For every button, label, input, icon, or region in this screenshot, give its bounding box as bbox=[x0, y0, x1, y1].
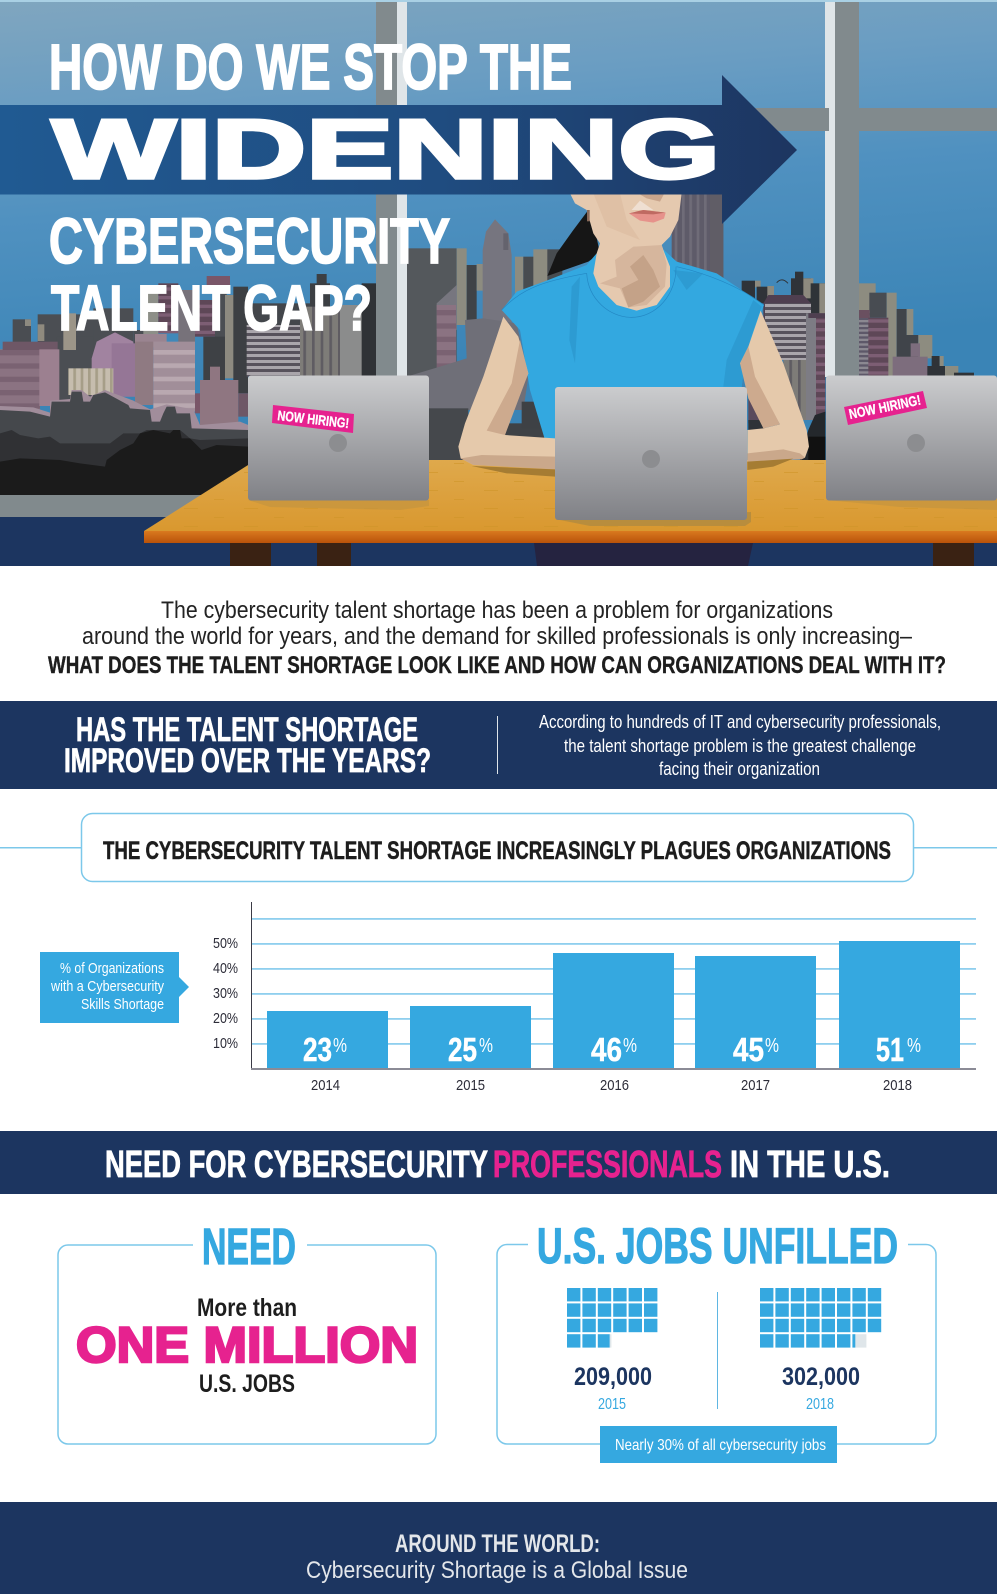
figure 2018: 302,000 bbox=[782, 1363, 860, 1391]
lips bbox=[629, 210, 666, 223]
bar values: % bbox=[333, 1035, 347, 1057]
banner heading: IMPROVED OVER THE YEARS? bbox=[64, 742, 431, 780]
table legs and seated legs bbox=[230, 543, 974, 566]
right laptop bbox=[826, 376, 997, 500]
left arm bbox=[458, 317, 555, 468]
hero title: TALENT GAP? bbox=[51, 272, 372, 344]
bar values: 46 bbox=[591, 1031, 622, 1068]
figure 2018 bbox=[782, 1363, 860, 1413]
table bbox=[144, 460, 997, 543]
y axis labels: 30% bbox=[213, 985, 238, 1002]
left city skyline bbox=[0, 274, 377, 495]
bar values: 45 bbox=[733, 1031, 764, 1068]
bar values: 23 bbox=[303, 1031, 332, 1068]
need statistic: More than bbox=[197, 1294, 297, 1322]
hero illustration bbox=[0, 0, 997, 566]
nose bbox=[639, 194, 664, 202]
banner heading: HAS THE TALENT SHORTAGE bbox=[76, 711, 418, 749]
chart legend callout: % of Organizations bbox=[60, 960, 164, 977]
sky background bbox=[0, 0, 997, 517]
hero title: HOW DO WE STOP THE bbox=[49, 31, 572, 103]
intro text: The cybersecurity talent shortage has been a problem for organizations bbox=[161, 597, 833, 624]
footer banner: AROUND THE WORLD: bbox=[395, 1530, 600, 1558]
chart legend callout bbox=[40, 952, 189, 1023]
bar values: 51 bbox=[876, 1031, 904, 1068]
axes bbox=[251, 902, 976, 1070]
arm shadows bbox=[472, 466, 555, 477]
y axis labels: 40% bbox=[213, 960, 238, 977]
banner description: facing their organization bbox=[659, 759, 820, 779]
blouse bbox=[502, 250, 764, 440]
floor bbox=[0, 517, 997, 566]
panel heading: NEED bbox=[202, 1218, 296, 1275]
sticker: now hiring right bbox=[844, 391, 927, 425]
intro text bbox=[48, 597, 946, 679]
footer banner bbox=[0, 1502, 997, 1594]
hero title: CYBERSECURITY bbox=[49, 205, 450, 277]
y axis labels: 20% bbox=[213, 1010, 238, 1027]
banner: has the talent shortage improved bbox=[0, 701, 997, 789]
bar values: % bbox=[907, 1035, 921, 1057]
banner: need for cybersecurity professionals: PROFESSIONALS bbox=[493, 1144, 722, 1186]
x axis labels bbox=[311, 1077, 912, 1094]
figure 2015: 209,000 bbox=[574, 1363, 652, 1391]
chart legend callout: with a Cybersecurity bbox=[50, 978, 164, 995]
bar values: % bbox=[623, 1035, 637, 1057]
pictogram 2015 bbox=[567, 1288, 657, 1348]
bar values: % bbox=[479, 1035, 493, 1057]
figure 2018: 2018 bbox=[806, 1396, 834, 1413]
panel: need bbox=[58, 1218, 436, 1444]
center laptop bbox=[555, 387, 751, 526]
figure 2015: 2015 bbox=[598, 1396, 626, 1413]
bar values: 25 bbox=[448, 1031, 477, 1068]
centre city skyline bbox=[407, 193, 723, 462]
sticker: now hiring left: NOW HIRING! bbox=[277, 407, 350, 431]
banner: need for cybersecurity professionals bbox=[0, 1131, 997, 1194]
face and neck bbox=[570, 193, 682, 311]
blouse seams bbox=[502, 267, 764, 317]
hair bbox=[547, 210, 600, 276]
x axis labels: 2014 bbox=[311, 1077, 340, 1094]
banner: need for cybersecurity professionals: NEED FOR CYBERSECURITY bbox=[105, 1144, 488, 1186]
x axis labels: 2016 bbox=[600, 1077, 629, 1094]
sticker: now hiring right: NOW HIRING! bbox=[847, 392, 922, 422]
need statistic: ONE MILLION bbox=[76, 1317, 418, 1373]
need statistic bbox=[76, 1294, 418, 1398]
arrow banner bbox=[0, 75, 797, 224]
x axis labels: 2015 bbox=[456, 1077, 485, 1094]
figure 2015 bbox=[574, 1363, 652, 1413]
need statistic: U.S. JOBS bbox=[199, 1370, 295, 1398]
callout: nearly 30 percent: Nearly 30% of all cybersecurity jobs bbox=[615, 1437, 826, 1454]
bar values: % bbox=[765, 1035, 779, 1057]
bars bbox=[267, 941, 960, 1069]
y axis labels: 50% bbox=[213, 935, 238, 952]
gridlines bbox=[251, 918, 976, 1045]
y axis labels bbox=[213, 935, 238, 1052]
y axis labels: 10% bbox=[213, 1035, 238, 1052]
window frame bbox=[0, 0, 997, 517]
banner description bbox=[539, 712, 941, 779]
chart legend callout: Skills Shortage bbox=[81, 996, 164, 1013]
x axis labels: 2017 bbox=[741, 1077, 770, 1094]
bar chart bbox=[213, 902, 976, 1094]
callout: nearly 30 percent bbox=[600, 1426, 837, 1463]
chart title box bbox=[0, 814, 997, 882]
intro text: around the world for years, and the demand for skilled professionals is only increasing– bbox=[82, 623, 913, 650]
bar values bbox=[303, 1031, 921, 1068]
left laptop bbox=[248, 376, 429, 500]
banner description: the talent shortage problem is the greatest challenge bbox=[564, 736, 916, 756]
footer banner: Cybersecurity Shortage is a Global Issue bbox=[306, 1557, 688, 1584]
panel: jobs unfilled bbox=[497, 1218, 936, 1463]
hero title: WIDENING bbox=[52, 102, 720, 196]
banner heading bbox=[64, 711, 431, 780]
x axis labels: 2018 bbox=[883, 1077, 912, 1094]
earring bbox=[587, 210, 590, 221]
pictogram 2018 bbox=[760, 1288, 881, 1348]
woman bbox=[458, 193, 809, 477]
right arm bbox=[740, 311, 809, 462]
right city skyline bbox=[742, 272, 974, 460]
banner: need for cybersecurity professionals: IN THE U.S. bbox=[730, 1144, 890, 1186]
hero title bbox=[49, 31, 720, 344]
